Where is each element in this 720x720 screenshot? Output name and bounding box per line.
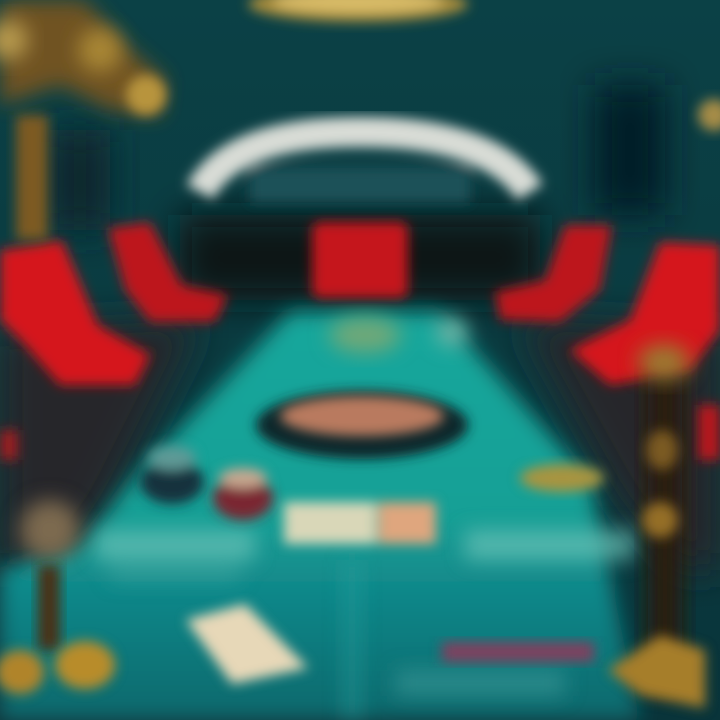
centre cards: [284, 502, 436, 544]
right red chairs: [495, 225, 720, 460]
arched white sign: [200, 132, 530, 202]
top table chips: [329, 317, 468, 353]
right wall lamp: [698, 99, 720, 131]
left gold stand: [0, 500, 115, 694]
dark chip stack: [140, 446, 204, 504]
left and right floor shadow: [0, 320, 720, 570]
centre red chair: [312, 222, 408, 298]
purple label: [442, 642, 594, 662]
table centre seam and lower markings: [95, 530, 635, 720]
right gold stand: [608, 344, 705, 708]
roulette wheel: [256, 391, 468, 459]
left gold lamp: [0, 0, 166, 240]
paper card on table: [186, 604, 308, 684]
ceiling lamp: [248, 0, 468, 22]
left red chairs: [0, 222, 228, 460]
table surface: [0, 312, 640, 720]
right gold chips: [520, 464, 604, 492]
red chip stack: [213, 468, 273, 520]
dark band behind chairs: [180, 215, 540, 300]
